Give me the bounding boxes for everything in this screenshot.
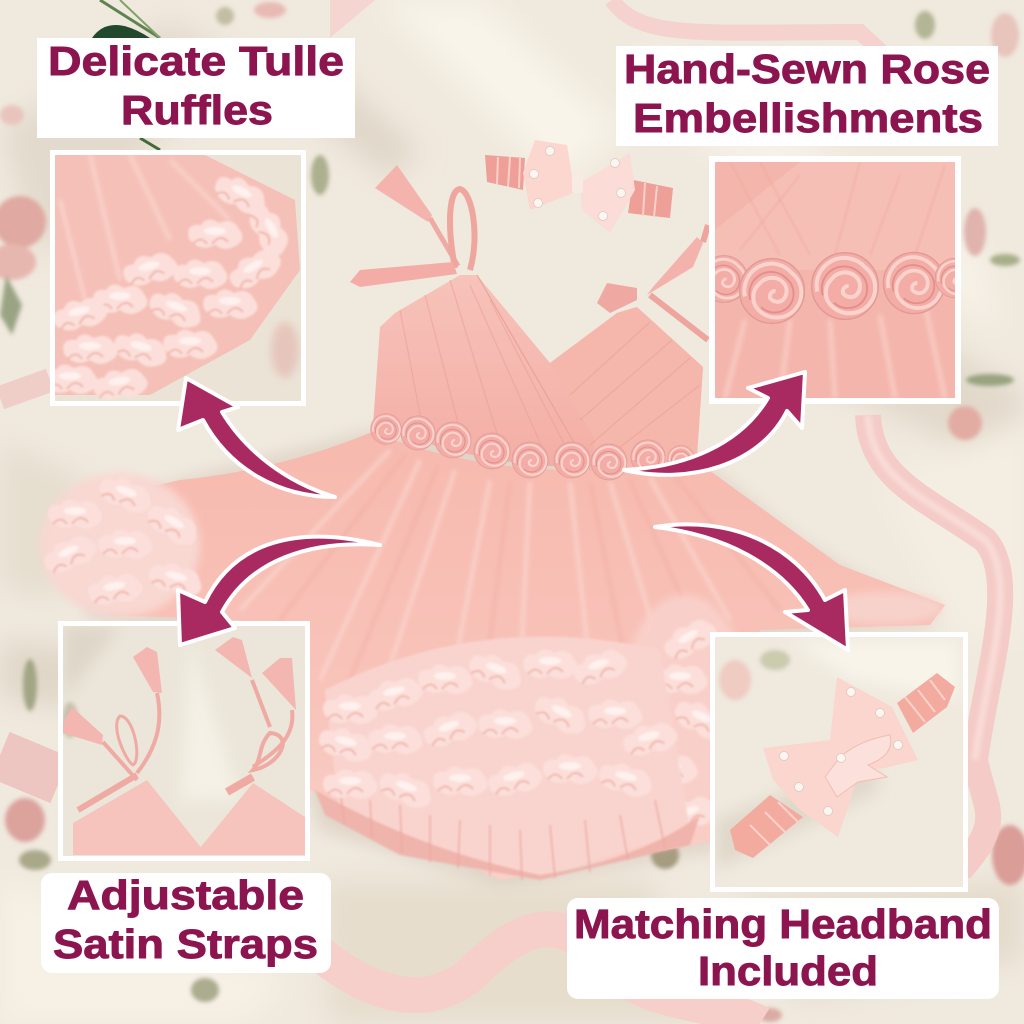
right side ruffle [623,592,943,837]
arrow: to headband [655,524,848,650]
dress [39,140,945,885]
arrow: to satin straps [178,537,380,645]
rose waistband [371,414,694,480]
label: adjustable satin straps [41,872,331,973]
arrow: to rose embellishments [624,372,805,475]
right strap with bow [597,225,708,340]
skirt [50,432,945,880]
arrow: to tulle ruffles [178,378,335,497]
label: adjustable satin straps: Adjustable [67,872,304,918]
skirt pleats [240,450,730,690]
green leaves top left [92,0,160,150]
panel: tulle ruffles photo [43,150,306,406]
label: hand-sewn rose embellishments: Embellishments [633,95,983,141]
label: matching headband included [567,898,999,999]
bodice [373,275,703,470]
left side ruffle [39,471,206,617]
label: adjustable satin straps: Satin Straps [53,921,318,967]
panel: rose embellishments photo [701,156,975,404]
label: hand-sewn rose embellishments: Hand-Sewn Rose [624,46,990,92]
label: delicate tulle ruffles [37,38,355,138]
label: hand-sewn rose embellishments [616,46,998,146]
left strap [350,165,475,287]
headband accessory [485,140,673,233]
panel: matching headband photo [710,632,968,892]
label: matching headband included: Matching Headband [574,901,992,947]
dress shadow [60,430,940,885]
label: matching headband included: Included [698,948,878,994]
label: delicate tulle ruffles: Delicate Tulle [48,38,344,84]
label: delicate tulle ruffles: Ruffles [121,87,273,133]
panel: satin straps photo [58,621,310,861]
hem ruffles [315,637,700,880]
